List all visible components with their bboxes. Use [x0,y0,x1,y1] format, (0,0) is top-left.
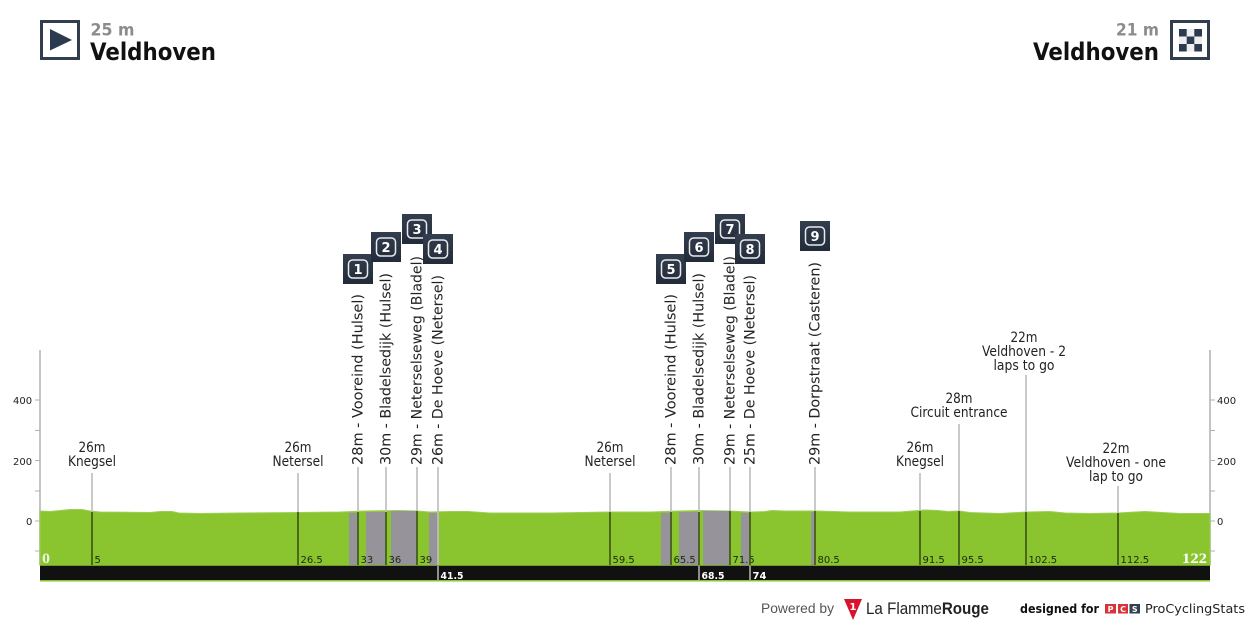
badge 4 [423,234,453,264]
label: Knegsel [68,440,116,470]
icon: PCS logo: P [1108,605,1114,614]
label: Veldhoven 2 laps to go: laps to go [994,358,1054,374]
finish town: Veldhoven [1033,38,1159,66]
elevation profile area [40,510,1210,566]
kilometre labels: 112.5 [1120,555,1149,566]
ProCyclingStats name: ProCyclingStats [1145,602,1245,616]
kilometre labels: 36 [388,555,401,566]
kilometre labels: 0 [42,551,50,567]
kilometre labels: 95.5 [962,555,984,566]
elevation axes: 0 [1217,517,1223,528]
badge 5: 5 [666,263,676,278]
badge 3 [402,214,432,244]
badge 6 [684,232,714,262]
kilometre labels: 71.5 [732,555,755,566]
label: Veldhoven one lap to go: 22m [1102,441,1130,457]
badge 6: 6 [694,241,704,256]
label: Veldhoven one lap to go: Veldhoven - one [1066,455,1166,471]
label: Knegsel second passage: 26m [906,440,934,456]
label: Netersel second passage: Netersel [584,454,636,470]
kilometre labels: 59.5 [612,555,635,566]
icon: PCS logo: S [1132,605,1138,614]
sector label 9: 29m - Dorpstraat (Casteren) [808,262,824,465]
distance band: 68.5 [702,571,725,582]
powered by credit: Powered by [761,600,834,616]
start header [42,20,216,66]
kilometre labels: 80.5 [818,555,840,566]
sector label 8: 25m - De Hoeve (Netersel) [742,275,758,465]
badge 4: 4 [433,243,443,258]
finish header [1033,20,1208,66]
label: Netersel [272,440,324,470]
start town: Veldhoven [90,38,216,66]
kilometre labels: 39 [420,555,432,566]
sector label 6: 30m - Bladelsedijk (Hulsel) [692,273,708,465]
sector label 4: 26m - De Hoeve (Netersel) [430,275,446,465]
designed for credit [1020,602,1245,616]
icon: start flag [42,22,78,58]
badge 9: 9 [810,230,820,245]
icon: finish flag [1172,22,1208,58]
sector label 5: 28m - Vooreind (Hulsel) [664,294,680,465]
label: Knegsel second passage [896,440,944,470]
distance band: 74 [752,571,766,582]
label: Circuit entrance: Circuit entrance [910,405,1008,421]
badge 7: 7 [725,223,735,238]
badge 3: 3 [412,223,422,238]
start altitude: 25 m [90,20,134,40]
icon: PCS logo: C [1120,605,1126,614]
badge 2: 2 [381,241,391,256]
label: Veldhoven one lap to go [1066,441,1166,485]
finish altitude: 21 m [1116,20,1159,40]
elevation axes: 200 [13,457,32,468]
kilometre labels: 65.5 [674,555,696,566]
label: Veldhoven 2 laps to go [982,330,1066,374]
label: Veldhoven 2 laps to go: 22m [1010,330,1038,346]
elevation axes: 400 [13,396,32,407]
marker lines [92,375,1118,565]
sector label 7: 29m - Neterselseweg (Bladel) [722,256,738,465]
label: Netersel: Netersel [272,454,324,470]
badge 8 [735,234,765,264]
badge 1: 1 [353,263,363,278]
label: Veldhoven 2 laps to go: Veldhoven - 2 [982,344,1066,360]
label: Circuit entrance: 28m [946,391,972,407]
label: Circuit entrance [910,391,1008,421]
kilometre labels: 5 [94,555,101,566]
badge 2 [371,232,401,262]
badge 9 [800,221,830,251]
elevation axes [13,350,1236,565]
elevation axes: 200 [1217,457,1236,468]
cobbled sectors [349,511,815,565]
designed for credit: designed for [1020,602,1099,616]
kilometre labels: 91.5 [922,555,945,566]
kilometre labels: 122 [1182,551,1207,567]
distance band: 41.5 [440,571,464,582]
sector label 2: 30m - Bladelsedijk (Hulsel) [378,273,394,465]
elevation axes: 0 [26,517,32,528]
kilometre labels: 102.5 [1028,555,1057,566]
elevation axes: 400 [1217,396,1236,407]
label: Veldhoven one lap to go: lap to go [1089,469,1143,485]
vertical sector labels [350,256,824,465]
kilometre labels [42,551,1207,567]
La Flamme Rouge wordmark: La FlammeRouge [866,599,989,618]
label: Netersel: 26m [284,440,312,456]
icon: La Flamme Rouge logo [844,599,862,620]
icon: PCS logo [1105,604,1140,614]
horizontal place labels [68,330,1166,485]
powered by credit [761,599,989,620]
label: Knegsel: 26m [78,440,106,456]
badge 1 [343,254,373,284]
kilometre labels: 33 [360,555,373,566]
kilometre labels: 26.5 [300,555,323,566]
badge 8: 8 [745,243,755,258]
badge 7 [715,214,745,244]
label: Knegsel second passage: Knegsel [896,454,944,470]
sector label 1: 28m - Vooreind (Hulsel) [350,294,366,465]
badge 5 [656,254,686,284]
sector label 3: 29m - Neterselseweg (Bladel) [410,256,426,465]
label: Netersel second passage [584,440,636,470]
label: Netersel second passage: 26m [596,440,624,456]
label: Knegsel: Knegsel [68,454,116,470]
icon: La Flamme Rouge logo: 1 [850,602,857,613]
distance band [40,565,1210,582]
numbered sector badges [343,214,830,284]
